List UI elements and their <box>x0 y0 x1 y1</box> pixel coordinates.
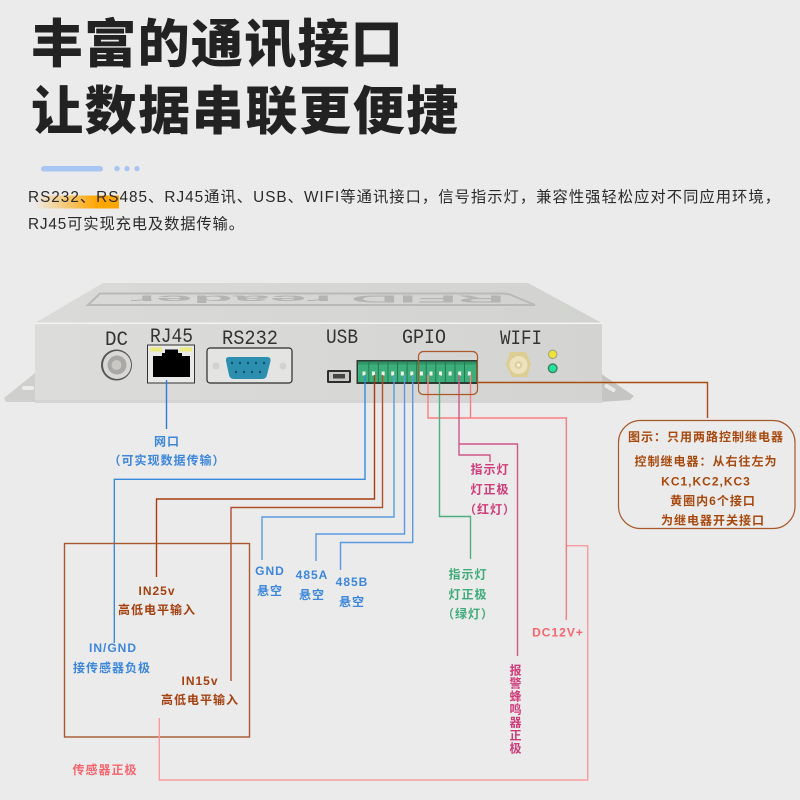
port labels: RS232 <box>222 328 278 351</box>
indicator LEDs <box>548 350 558 373</box>
callout: relay note: 为继电器开关接口 <box>661 512 765 528</box>
label: green indicator: 灯正极 <box>448 586 488 602</box>
device top face <box>35 283 602 323</box>
label: alarm buzzer positive (vertical): 警 <box>509 676 523 690</box>
wire: IN2 brown <box>156 375 374 577</box>
label: alarm buzzer positive (vertical): 器 <box>509 716 523 730</box>
label: network port: （可实现数据传输） <box>108 452 226 468</box>
intro text: RS232、RS485、RJ45通讯、USB、WIFI等通讯接口，信号指示灯，兼容性强轻松应对不同应用环境， <box>28 188 780 206</box>
USB port <box>327 370 351 383</box>
label: IN25v: IN25v <box>138 584 176 598</box>
label: alarm buzzer positive (vertical): 蜂 <box>509 688 523 704</box>
label: DC12V+: DC12V+ <box>532 626 584 640</box>
port labels: GPIO <box>402 327 446 350</box>
label: network port <box>108 434 226 468</box>
label: red indicator: （红灯） <box>464 502 516 516</box>
label: red indicator <box>464 462 516 516</box>
wire: RJ45 to network label <box>166 380 168 429</box>
WIFI antenna connector <box>506 352 531 377</box>
callout: relay note <box>618 420 795 528</box>
wire: 485A blue <box>316 375 404 561</box>
right mounting bracket <box>600 373 634 402</box>
device <box>4 283 634 403</box>
wire: 485B blue <box>340 375 413 570</box>
port labels: DC <box>105 329 128 352</box>
label: GND <box>255 564 285 598</box>
label: green indicator: （绿灯） <box>442 606 494 621</box>
label: IN25v <box>118 584 196 617</box>
label: alarm buzzer positive (vertical): 正 <box>509 728 523 742</box>
label: network port: 网口 <box>154 434 180 448</box>
label: IN15v <box>161 674 239 707</box>
GPIO highlight outline <box>418 352 478 394</box>
embossed RFID reader logo: RFID reader <box>130 293 505 304</box>
label: green indicator: 指示灯 <box>448 566 488 582</box>
label: green indicator <box>442 566 494 621</box>
label: sensor positive: 传感器正极 <box>72 762 138 777</box>
label: 485A: 485A <box>296 568 328 582</box>
title: 让数据串联更便捷 <box>31 84 460 142</box>
label: IN15v: 高低电平输入 <box>161 692 239 707</box>
orange highlight <box>34 196 119 208</box>
label: 485B: 485B <box>336 575 368 589</box>
label: alarm buzzer positive (vertical): 报 <box>509 664 523 678</box>
callout: relay note: 图示：只用两路控制继电器 <box>628 429 784 444</box>
label: 485A: 悬空 <box>299 587 325 602</box>
decorative bar and dots <box>41 166 140 172</box>
GPIO terminal block <box>356 360 478 384</box>
title <box>31 16 460 142</box>
label: 485B: 悬空 <box>339 594 365 609</box>
RJ45 port <box>148 345 194 383</box>
label: 485B <box>336 575 368 609</box>
label: alarm buzzer positive (vertical): 极 <box>509 740 523 756</box>
wire: DC12V+ pink <box>428 375 566 620</box>
label: alarm buzzer positive (vertical): 鸣 <box>509 702 523 716</box>
label: IN25v: 高低电平输入 <box>118 602 196 617</box>
callout: relay note: KC1,KC2,KC3 <box>661 474 751 488</box>
callout: relay note: 控制继电器：从右往左为 <box>634 454 778 468</box>
port labels: USB <box>326 327 358 350</box>
wire: sensor positive and DC12V pink <box>159 546 588 780</box>
label: IN/GND: 接传感器负极 <box>73 660 151 675</box>
label: IN/GND <box>73 641 151 675</box>
wire: green indicator <box>440 375 470 559</box>
wire: IN/GND blue <box>114 375 365 643</box>
wire: GND blue <box>262 375 394 560</box>
label: GND: GND <box>255 564 285 578</box>
wire: IN1 brown <box>231 375 382 681</box>
label: GND: 悬空 <box>257 583 283 598</box>
port labels <box>105 326 542 352</box>
label: IN15v: IN15v <box>181 674 219 688</box>
wire: red indicator and alarm buzzer <box>459 375 518 656</box>
label: alarm buzzer positive (vertical) <box>509 664 523 756</box>
leader to callout <box>478 382 708 418</box>
intro text: RJ45可实现充电及数据传输。 <box>28 216 244 233</box>
device front face <box>35 323 602 402</box>
label: 485A <box>296 568 328 602</box>
port labels: WIFI <box>500 328 542 351</box>
DC jack <box>101 350 132 380</box>
intro text <box>28 188 780 233</box>
left mounting bracket <box>4 373 38 402</box>
callout: relay note: 黄圈内6个接口 <box>670 493 756 508</box>
label: red indicator: 灯正极 <box>470 482 510 496</box>
label: IN/GND: IN/GND <box>89 641 137 655</box>
RS232 port <box>207 348 292 383</box>
port labels: RJ45 <box>150 326 193 349</box>
title: 丰富的通讯接口 <box>31 16 404 74</box>
label: red indicator: 指示灯 <box>470 462 510 476</box>
sensor brown frame <box>64 544 250 737</box>
